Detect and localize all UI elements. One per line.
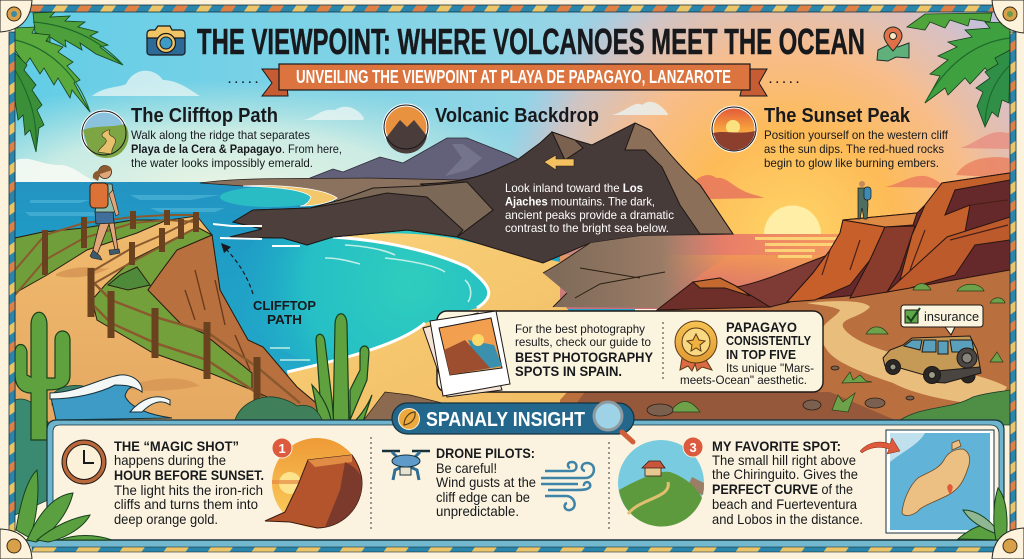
text: top five [680,319,814,387]
callout: clifftop path: PATH [267,312,302,327]
heading pill [392,402,634,442]
insight 1: magic shot [62,438,362,528]
subtitle banner: UNVEILING THE VIEWPOINT AT PLAYA DE PAPAGAYO, LANZAROTE [296,67,731,87]
text block: Look inland toward the Los [505,181,643,195]
sea highlights [25,195,225,216]
cactus middle [312,314,372,425]
text: photography guide: SPOTS IN SPAIN. [515,363,622,379]
icon: clock [62,440,106,484]
icon: medal [675,321,717,371]
sea left [15,182,635,382]
map of lanzarote [886,430,994,533]
sun reflection [755,237,840,258]
text block: Wind gusts at the [436,474,536,490]
section: volcanic backdrop [384,105,674,235]
shrub behind wave [52,385,93,405]
panel: photography and ranking card [423,311,823,397]
text: top five: PAPAGAYO [726,319,797,335]
left sand and land [15,216,340,425]
insurance tag: insurance [924,309,979,324]
icon: leaf badge [398,408,420,430]
section: the clifftop path [82,105,342,170]
text block: The small hill right above [712,452,856,468]
icon: map pin [877,27,909,61]
icon: camera [147,26,185,55]
text block: deep orange gold. [114,511,218,527]
text block: MY FAVORITE SPOT: [712,438,841,454]
corner bottom right [992,528,1024,559]
divider [370,437,372,531]
illustration: cliff at sunset [265,438,362,528]
inlet turquoise [220,187,320,207]
icon: wind [541,462,594,510]
icon: drone [382,451,430,480]
palm fronds top left [15,12,123,152]
hiker right [858,181,871,219]
text block: Position yourself on the western cliff [764,128,949,142]
wave [50,375,172,420]
bay ripples [270,245,471,360]
beach [287,233,670,425]
sun [764,205,821,234]
text: photography guide: results, check our guide to [515,335,651,349]
text block: and Lobos in the distance. [712,511,863,527]
text block [764,128,949,170]
small far bay sand [243,186,337,206]
corner top right [992,0,1024,33]
car body [883,336,981,384]
text block: the water looks impossibly emerald. [131,156,313,170]
cactus left [15,312,70,440]
badge 1: 1 [278,441,286,456]
text block: cliff edge can be [436,489,530,505]
text: top five: meets-Ocean" aesthetic. [680,373,807,387]
dots right: ..... [769,74,799,86]
surf at rocks [213,224,300,246]
icon: volcano [384,105,428,154]
heading: The Clifftop Path [131,105,278,127]
foreground dark headland [230,182,493,245]
leaves bottom right [958,488,1007,540]
insight 3: favorite spot [618,430,994,533]
callout: clifftop path: CLIFFTOP [253,298,316,313]
mountain highlights [445,144,482,176]
text block: contrast to the bright sea below. [505,221,669,235]
text block: Playa de la Cera & Papagayo. From here, [131,142,342,156]
text block [436,445,536,519]
arrow pointing left [544,155,574,170]
text block: Ajaches mountains. The dark, [505,194,655,208]
icon: path [82,111,129,158]
icon: photographs [423,311,510,397]
badge 3 [683,437,703,457]
red foreground rock [657,252,835,310]
heading text: SPANALY INSIGHT [426,409,585,431]
badge 3: 3 [690,440,697,455]
foreground brown rocks [543,234,733,308]
text: top five: CONSISTENTLY [726,333,811,348]
text block: unpredictable. [436,503,519,519]
text block: beach and Fuerteventura [712,496,857,512]
text: photography guide: For the best photography [515,322,645,336]
icon: magnifier [594,402,633,442]
clouds [16,71,1009,199]
red cliffs [787,173,1010,302]
small bushes, stones and tufts [647,284,1005,416]
far headland [200,170,530,235]
divider [608,442,610,531]
text: top five: IN TOP FIVE [726,347,796,362]
left dark shrubs [15,399,48,515]
text block: PERFECT CURVE of the [712,481,853,497]
text block: happens during the [114,452,226,468]
icon: sunset [712,107,756,151]
text block: Walk along the ridge that separates [131,128,310,142]
leaves bottom left [16,470,112,542]
badge 1 [272,438,292,458]
text: photography guide: BEST PHOTOGRAPHY [515,349,654,365]
corner bottom left [0,529,32,559]
text block: begin to glow like burning embers. [764,156,939,170]
text block: HOUR BEFORE SUNSET. [114,467,264,483]
ground shade [560,392,895,425]
ground right [560,262,1010,425]
sunset sea [560,234,1010,309]
divider [662,322,664,380]
volcano [420,123,733,263]
text block [114,438,264,527]
subtitle banner [262,64,767,96]
insight 2: drone pilots [382,445,594,519]
illustration: hill [618,440,704,527]
sky [15,12,1010,234]
text block [131,128,342,170]
insurance car [883,305,983,384]
text block: DRONE PILOTS: [436,445,535,461]
text block [505,181,674,235]
text block [712,438,863,527]
distant mountains [310,138,540,190]
palm fronds top right [907,13,1010,127]
rock outlines [543,243,665,307]
turquoise bay [235,190,585,380]
dots left: ..... [228,74,258,86]
heading: The Sunset Peak [764,105,911,127]
text block: the Chiringuito. Gives the [712,466,858,482]
fences [15,210,300,405]
text block: cliffs and turns them into [114,496,258,512]
text block: ancient peaks provide a dramatic [505,208,674,222]
dark rock lump [230,193,463,245]
rock below card [360,392,590,425]
shrubs [235,390,1010,425]
text block: The light hits the iron-rich [114,482,263,498]
text block: Be careful! [436,460,497,476]
road [807,301,1007,402]
corner top left [0,0,32,32]
callout: clifftop path [221,243,316,327]
section: the sunset peak [712,105,949,170]
panel: spanaly insight [15,402,1010,547]
arrow to map [860,438,900,454]
text: photography guide [515,322,654,379]
text block: as the sun dips. The red-hued rocks [764,142,944,156]
text block: THE “MAGIC SHOT” [114,438,239,454]
hiker left [90,165,120,260]
surf line [287,237,489,372]
text: top five: Its unique "Mars- [726,361,814,375]
heading: Volcanic Backdrop [435,105,599,127]
